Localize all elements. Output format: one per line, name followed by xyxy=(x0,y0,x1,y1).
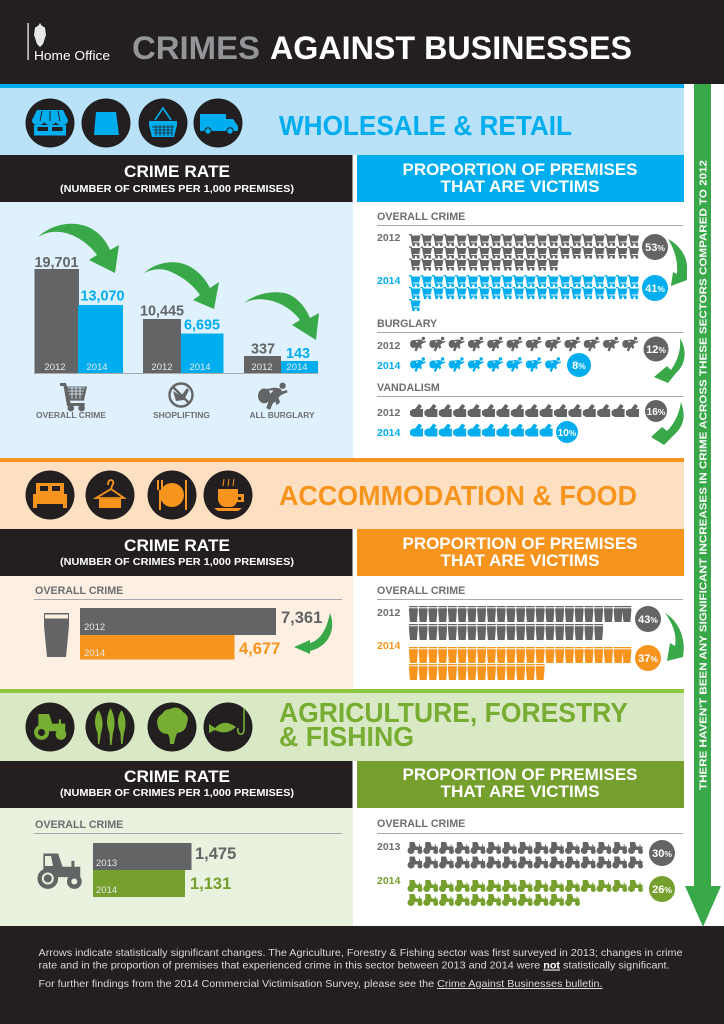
pictogram chart: vandalism: 2014 xyxy=(377,427,401,439)
pictogram chart: accommodation overall crime: 2012 xyxy=(377,607,401,619)
icon: shopping bag xyxy=(82,98,130,148)
bar chart: crime rate retail: 2012 xyxy=(151,362,173,373)
arrow: overall crime proportion down xyxy=(668,239,687,286)
bar chart: crime rate accommodation: OVERALL CRIME xyxy=(35,585,123,597)
title: AGAINST BUSINESSES xyxy=(270,30,632,66)
bar chart: crime rate accommodation xyxy=(34,585,342,660)
bar chart: crime rate agriculture: 1,475 xyxy=(195,845,236,863)
icon: basket xyxy=(138,98,188,148)
icon: tractor large xyxy=(37,854,82,889)
bar chart: crime rate agriculture xyxy=(34,819,342,897)
bar chart: crime rate agriculture: OVERALL CRIME xyxy=(35,819,123,831)
bar chart: crime rate accommodation: 2012 xyxy=(84,622,105,633)
pictogram chart: overall crime retail: 41% xyxy=(645,283,665,295)
panel heading: crime rate: (NUMBER OF CRIMES PER 1,000 PREMISES) xyxy=(60,183,294,195)
bar chart: crime rate accommodation: 7,361 xyxy=(281,609,322,627)
bar chart: crime rate agriculture: 1,131 xyxy=(190,875,231,893)
icon: pint glass xyxy=(44,613,69,657)
bar chart: crime rate agriculture: 2014 xyxy=(96,885,117,896)
panel heading: proportion of premises: THAT ARE VICTIMS xyxy=(440,178,600,196)
icon: bed xyxy=(26,470,74,520)
icon: tractor xyxy=(26,702,74,752)
arrow: accommodation crime rate down xyxy=(294,613,332,654)
icon: plate and cutlery xyxy=(148,470,196,520)
bar chart: crime rate agriculture: 2013 xyxy=(96,858,117,869)
bar chart: crime rate retail: 337 xyxy=(251,342,275,358)
bar chart: crime rate retail: 10,445 xyxy=(140,304,184,320)
pictogram chart: agriculture overall crime: OVERALL CRIME xyxy=(377,818,465,830)
panel heading: crime rate: CRIME RATE xyxy=(124,768,230,786)
footer: rate and in the proportion of premises that experienced crime in this sector between 2013 and 2014 were not statistically significant. xyxy=(38,960,670,972)
section heading: agriculture forestry and fishing xyxy=(279,697,628,752)
icon and label: all burglary xyxy=(250,383,315,420)
icon: wheat xyxy=(86,702,134,752)
bar chart: crime rate retail: 2014 xyxy=(86,362,108,373)
bar chart: crime rate retail: 13,070 xyxy=(80,288,125,304)
bar chart: crime rate retail: 2012 xyxy=(251,362,273,373)
section heading: agriculture forestry and fishing: AGRICULTURE, FORESTRY xyxy=(279,697,628,728)
pictogram chart: accommodation overall crime: 37% xyxy=(638,653,658,665)
panel heading: proportion of premises xyxy=(357,155,684,202)
pictogram chart: accommodation overall crime xyxy=(377,585,683,680)
pictogram chart: burglary: 2014 xyxy=(377,360,401,372)
arrow: accommodation proportion down xyxy=(665,613,684,661)
panel heading: proportion of premises: THAT ARE VICTIMS xyxy=(440,552,600,570)
pictogram chart: agriculture overall crime: 2013 xyxy=(377,841,401,853)
bar chart: crime rate retail xyxy=(34,255,318,374)
pictogram chart: agriculture overall crime: 2014 xyxy=(377,875,401,887)
pictogram chart: agriculture overall crime: 30% xyxy=(652,848,672,860)
bar chart: crime rate retail: 2012 xyxy=(44,362,66,373)
section heading: accommodation and food: ACCOMMODATION & FOOD xyxy=(279,480,637,511)
arrow: burglary proportion down xyxy=(654,338,685,383)
panel heading: crime rate: (NUMBER OF CRIMES PER 1,000 PREMISES) xyxy=(60,787,294,799)
pictogram chart: vandalism xyxy=(377,382,683,443)
panel heading: proportion of premises: PROPORTION OF PREMISES xyxy=(402,161,638,179)
bar chart: crime rate retail: 2014 xyxy=(286,362,308,373)
panel heading: proportion of premises xyxy=(357,529,684,576)
pictogram chart: agriculture overall crime: 26% xyxy=(652,884,672,896)
logo: Home Office xyxy=(28,23,110,63)
panel heading: crime rate xyxy=(0,155,352,202)
pictogram chart: accommodation overall crime: 2014 xyxy=(377,640,401,652)
icon and label: shoplifting xyxy=(153,384,210,420)
arrow: overall crime down xyxy=(38,224,119,273)
title: CRIMES xyxy=(132,30,260,66)
panel heading: proportion of premises: THAT ARE VICTIMS xyxy=(440,783,600,801)
arrow: no significant increases across sectors xyxy=(685,84,721,927)
section: accommodation and food xyxy=(0,458,684,689)
bar chart: crime rate accommodation: 2014 xyxy=(84,648,105,659)
arrow: vandalism proportion down xyxy=(651,402,684,445)
icon: fish and hook xyxy=(204,702,252,752)
icon: shop xyxy=(26,98,74,148)
panel heading: proportion of premises: PROPORTION OF PREMISES xyxy=(402,766,638,784)
section heading: wholesale and retail: WHOLESALE & RETAIL xyxy=(279,110,572,141)
arrow: no significant increases across sectors: THERE HAVEN'T BEEN ANY SIGNIFICANT INCREASES IN CRIME ACROSS THESE SECTORS COMPARED TO 2012 xyxy=(698,160,710,790)
section heading: agriculture forestry and fishing: & FISHING xyxy=(279,721,414,752)
pictogram chart: agriculture overall crime xyxy=(377,818,683,906)
bar chart: crime rate accommodation: 4,677 xyxy=(239,640,280,658)
icon: tree xyxy=(148,702,196,752)
bar chart: crime rate retail: 143 xyxy=(286,346,310,362)
icon and label: overall crime: OVERALL CRIME xyxy=(36,411,107,420)
pictogram chart: burglary xyxy=(377,318,683,377)
pictogram chart: overall crime retail: 2012 xyxy=(377,232,401,244)
pictogram chart: vandalism: VANDALISM xyxy=(377,382,440,394)
pictogram chart: accommodation overall crime: OVERALL CRIME xyxy=(377,585,465,597)
arrow: shoplifting down xyxy=(144,262,219,309)
section: agriculture forestry and fishing xyxy=(0,689,684,926)
pictogram chart: burglary: 2012 xyxy=(377,340,401,352)
pictogram chart: overall crime retail: 53% xyxy=(645,242,665,254)
icon: coffee cup xyxy=(204,470,252,520)
pictogram chart: burglary: BURGLARY xyxy=(377,318,437,330)
panel heading: crime rate: CRIME RATE xyxy=(124,537,230,555)
icon and label: shoplifting: SHOPLIFTING xyxy=(153,411,210,420)
panel heading: proportion of premises: PROPORTION OF PREMISES xyxy=(402,535,638,553)
bar chart: crime rate retail: 2014 xyxy=(189,362,211,373)
logo: Home Office: Home Office xyxy=(34,48,110,63)
arrow: burglary down xyxy=(244,292,319,340)
pictogram chart: overall crime retail: OVERALL CRIME xyxy=(377,211,465,223)
bar chart: crime rate retail: 19,701 xyxy=(34,255,79,271)
icon and label: all burglary: ALL BURGLARY xyxy=(250,411,315,420)
pictogram chart: vandalism: 2012 xyxy=(377,407,401,419)
panel heading: crime rate: (NUMBER OF CRIMES PER 1,000 PREMISES) xyxy=(60,556,294,568)
footer: For further findings from the 2014 Commercial Victimisation Survey, please see the Crime Against Businesses bulletin. xyxy=(38,979,602,990)
panel heading: crime rate xyxy=(0,529,352,576)
header bar xyxy=(0,0,724,84)
pictogram chart: accommodation overall crime: 43% xyxy=(638,614,658,626)
panel heading: crime rate: CRIME RATE xyxy=(124,163,230,181)
footer: Arrows indicate statistically significant changes. The Agriculture, Forestry & Fishing sector was first surveyed in 2013; changes in crime xyxy=(38,948,683,959)
icon and label: overall crime xyxy=(36,383,107,420)
panel heading: crime rate xyxy=(0,761,352,808)
panel heading: proportion of premises xyxy=(357,761,684,808)
section: wholesale and retail xyxy=(0,84,687,458)
pictogram chart: burglary: 8% xyxy=(572,360,586,372)
pictogram chart: overall crime retail: 2014 xyxy=(377,275,401,287)
pictogram chart: vandalism: 10% xyxy=(558,428,577,439)
pictogram chart: overall crime retail xyxy=(377,211,683,311)
footer xyxy=(0,926,724,1024)
icon: hanger xyxy=(86,470,134,520)
icon: delivery truck xyxy=(194,98,242,148)
pictogram chart: vandalism: 16% xyxy=(647,407,666,418)
pictogram chart: burglary: 12% xyxy=(646,344,666,356)
bar chart: crime rate retail: 6,695 xyxy=(184,318,220,334)
